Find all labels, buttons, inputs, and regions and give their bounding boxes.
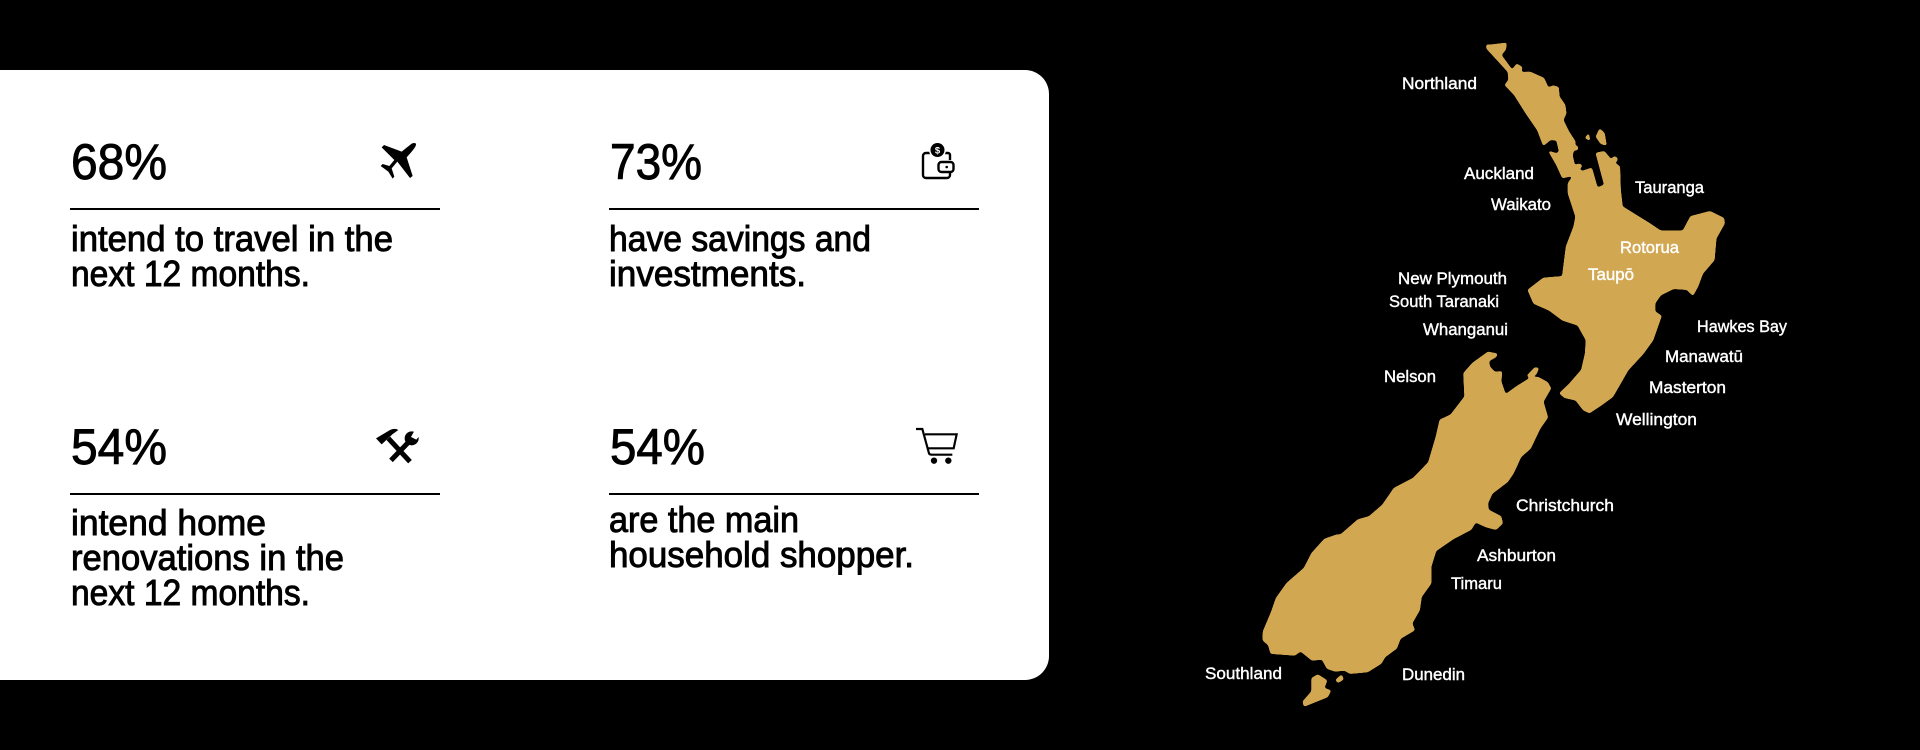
region labels: Christchurch: [1516, 496, 1614, 515]
region labels: South Taranaki: [1389, 292, 1499, 311]
region labels: Waikato: [1491, 195, 1551, 214]
region labels: Rotorua: [1620, 238, 1680, 257]
land masses: [1263, 43, 1724, 706]
north island: [1487, 43, 1724, 413]
icon: hammer and wrench: [376, 429, 422, 462]
region labels: Timaru: [1451, 574, 1502, 593]
stat: travel: [70, 134, 440, 294]
stat: renovations: [70, 419, 440, 613]
region labels: New Plymouth: [1398, 269, 1507, 288]
region labels: Tauranga: [1635, 178, 1705, 197]
description: shopper: [609, 499, 914, 575]
description: savings: have savings and: [609, 218, 871, 259]
panel: statistics card: [0, 70, 1049, 680]
region labels: Hawkes Bay: [1697, 317, 1787, 336]
region labels: Whanganui: [1423, 320, 1508, 339]
description: renovations: next 12 months.: [71, 572, 310, 613]
region labels: Masterton: [1649, 378, 1726, 397]
description: travel: intend to travel in the: [71, 218, 393, 259]
region labels: Dunedin: [1402, 665, 1465, 684]
description: renovations: renovations in the: [71, 537, 344, 578]
region labels: Northland: [1402, 74, 1477, 93]
map: New Zealand: [1205, 43, 1787, 706]
description: renovations: intend home: [71, 502, 266, 543]
description: savings: [609, 218, 871, 294]
icon: airplane: [381, 143, 416, 179]
percentage: 68%: 68%: [71, 134, 167, 190]
description: travel: [71, 218, 393, 294]
description: shopper: are the main: [609, 499, 799, 540]
region labels: [1205, 74, 1787, 684]
region labels: Nelson: [1384, 367, 1436, 386]
icon: wallet with coin: $: [935, 146, 941, 156]
region labels: Taupō: [1588, 265, 1634, 284]
description: travel: next 12 months.: [71, 253, 310, 294]
icon: wallet with coin: [923, 142, 954, 178]
region labels: Manawatū: [1665, 347, 1743, 366]
region labels: Ashburton: [1477, 546, 1556, 565]
region labels: Wellington: [1616, 410, 1697, 429]
stat: savings: [609, 134, 979, 294]
percentage: 73%: 73%: [610, 134, 702, 190]
region labels: Southland: [1205, 664, 1282, 683]
south island: [1263, 352, 1550, 706]
description: renovations: [71, 502, 344, 613]
description: savings: investments.: [609, 253, 806, 294]
percentage: 54% right: 54%: [610, 419, 705, 475]
region labels: Auckland: [1464, 164, 1534, 183]
icon: shopping cart: [916, 429, 957, 464]
stat: shopper: [609, 419, 979, 575]
percentage: 54% left: 54%: [71, 419, 167, 475]
description: shopper: household shopper.: [609, 534, 914, 575]
